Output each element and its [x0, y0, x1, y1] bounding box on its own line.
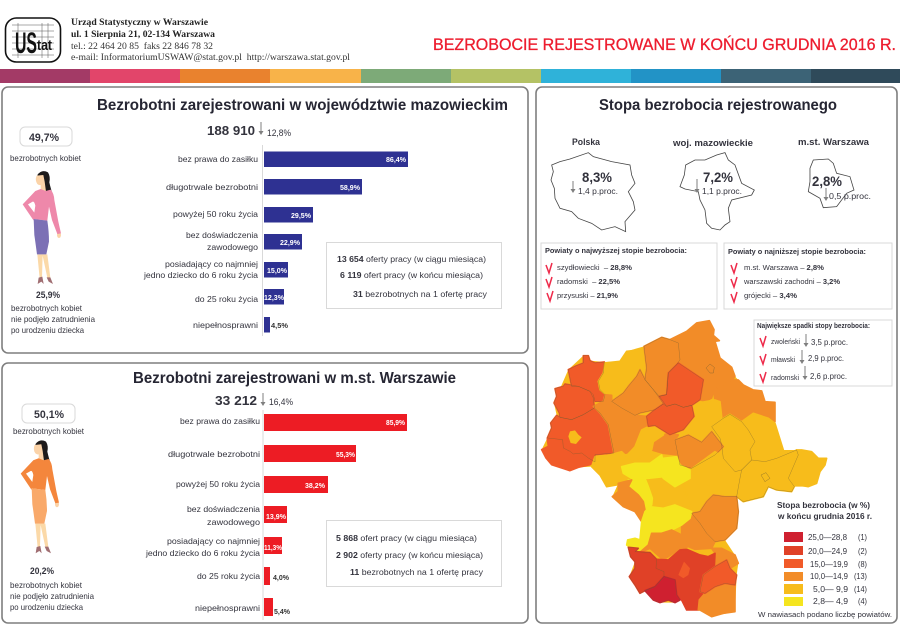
map legend: W nawiasach podano liczbę powiatów.	[758, 610, 892, 619]
total unemployed: 188 910	[207, 123, 255, 138]
bar chart: mazowieckie: 4,5%	[271, 321, 289, 330]
share of women box	[13, 404, 85, 436]
rate: Polska: 8,3%	[582, 169, 613, 185]
bar chart: Warszawa: 4,0%	[273, 573, 290, 582]
choropleth map of powiats	[542, 321, 827, 617]
main title: BEZROBOCIE REJESTROWANE W KOŃCU GRUDNIA 2016 R.	[433, 35, 896, 54]
box: lowest rate: Powiaty o najniższej stopie bezrobocia:	[728, 247, 866, 256]
rate: m.st. Warszawa: m.st. Warszawa	[798, 137, 870, 147]
rate: woj. mazowieckie: 7,2%	[703, 169, 734, 185]
box: largest drops: 2,9 p.proc.	[808, 354, 844, 363]
bar chart: mazowieckie: powyżej 50 roku życia	[173, 209, 258, 219]
header address text	[71, 17, 351, 62]
job offers box	[326, 520, 502, 586]
bar chart: Warszawa: jedno dziecko do 6 roku życia	[145, 548, 260, 558]
rate: Polska: 1,4 p.proc.	[578, 186, 618, 196]
map legend: (8)	[858, 560, 867, 569]
job offers box	[326, 242, 502, 308]
map legend: (14)	[854, 585, 867, 594]
bar chart: Warszawa: 85,9%	[386, 418, 406, 427]
caption: women after childbirth: 25,9%	[36, 290, 60, 301]
share of women box: bezrobotnych kobiet	[10, 154, 82, 163]
map legend: (1)	[858, 533, 867, 542]
bar chart: mazowieckie: 15,0%	[267, 266, 288, 275]
bar chart: Warszawa: niepełnosprawni	[195, 603, 260, 613]
rate: m.st. Warszawa: 2,8%	[812, 173, 843, 189]
map legend: 10,0—14,9	[810, 572, 849, 581]
bar chart: Warszawa: 13,9%	[266, 512, 287, 521]
box: largest drops: radomski	[771, 375, 799, 382]
map legend: 25,0—28,8	[808, 533, 848, 542]
job offers box: 13 654 oferty pracy (w ciągu miesiąca)	[337, 254, 486, 264]
job offers box: 11 bezrobotnych na 1 ofertę pracy	[350, 567, 484, 577]
box: lowest rate: m.st. Warszawa – 2,8%	[744, 263, 824, 272]
box: highest rate: Powiaty o najwyższej stopie bezrobocia:	[545, 246, 687, 255]
bar chart: mazowieckie: jedno dziecko do 6 roku życia	[143, 270, 258, 280]
bar chart: Warszawa: do 25 roku życia	[197, 571, 260, 581]
rate: Polska: Polska	[572, 137, 601, 147]
rate: m.st. Warszawa	[798, 137, 871, 208]
bar chart: mazowieckie: zawodowego	[207, 242, 258, 252]
job offers box: 2 902 oferty pracy (w końcu miesiąca)	[336, 550, 483, 560]
header address text: ul. 1 Sierpnia 21, 02-134 Warszawa	[71, 29, 216, 39]
share of women box: 50,1%	[34, 409, 64, 421]
bar chart: mazowieckie: długotrwale bezrobotni	[166, 182, 258, 192]
rate: woj. mazowieckie: woj. mazowieckie	[672, 138, 753, 148]
bar chart: Warszawa: 55,3%	[336, 450, 356, 459]
box: largest drops: zwoleński	[771, 339, 800, 346]
map legend: 5,0— 9,9	[813, 585, 849, 594]
panel: województwo mazowieckie	[2, 87, 528, 353]
caption: women after childbirth	[10, 566, 94, 612]
box: lowest rate	[724, 243, 892, 309]
bar chart: mazowieckie: 12,3%	[264, 293, 285, 302]
heading: Bezrobotni zarejestrowani w m.st. Warszawie	[133, 370, 456, 387]
map legend: (13)	[854, 572, 867, 581]
bar chart: Warszawa: 38,2%	[305, 481, 326, 490]
bar chart: mazowieckie: 86,4%	[386, 155, 407, 164]
box: lowest rate: warszawski zachodni – 3,2%	[743, 277, 840, 286]
logo: Urząd Statystyczny: tat	[37, 37, 52, 54]
icon: woman in pink	[23, 171, 61, 284]
map legend: Stopa bezrobocia (w %)	[777, 500, 870, 510]
bar chart: mazowieckie	[143, 145, 408, 336]
logo: Urząd Statystyczny	[6, 18, 60, 62]
header address text: Urząd Statystyczny w Warszawie	[71, 17, 208, 27]
bar chart: mazowieckie: bez prawa do zasiłku	[178, 154, 258, 164]
job offers box: 5 868 ofert pracy (w ciągu miesiąca)	[336, 533, 477, 543]
bar chart: Warszawa: zawodowego	[207, 517, 260, 527]
total unemployed	[207, 122, 291, 139]
box: largest drops	[754, 320, 892, 386]
bar chart: Warszawa: bez prawa do zasiłku	[180, 416, 260, 426]
heading: Bezrobotni zarejestrowani w województwie mazowieckim	[97, 97, 508, 114]
map legend: (2)	[858, 547, 867, 556]
rate: Polska	[551, 137, 635, 232]
map legend	[758, 500, 892, 619]
map legend: (4)	[858, 597, 867, 606]
caption: women after childbirth: nie podjęło zatrudnienia	[11, 315, 95, 324]
rate: woj. mazowieckie: 1,1 p.proc.	[702, 186, 742, 196]
map legend: 2,8— 4,9	[813, 597, 849, 606]
bar chart: mazowieckie: posiadający co najmniej	[165, 259, 258, 269]
bar chart: mazowieckie: bez doświadczenia	[186, 230, 258, 240]
caption: women after childbirth: 20,2%	[30, 566, 54, 577]
box: highest rate	[541, 243, 717, 309]
box: highest rate: przysuski – 21,9%	[557, 291, 618, 300]
job offers box: 31 bezrobotnych na 1 ofertę pracy	[353, 289, 488, 299]
heading: Stopa bezrobocia rejestrowanego	[599, 97, 837, 114]
map legend: 15,0—19,9	[810, 560, 849, 569]
box: largest drops: 3,5 p.proc.	[811, 338, 848, 347]
bar chart: mazowieckie: do 25 roku życia	[195, 294, 258, 304]
panel: stopa bezrobocia	[536, 87, 897, 623]
header address text: tel.: 22 464 20 85 faks 22 846 78 32	[71, 41, 213, 51]
caption: women after childbirth: bezrobotnych kobiet	[10, 581, 83, 590]
total unemployed: 33 212	[215, 393, 257, 408]
bar chart: Warszawa: długotrwale bezrobotni	[168, 449, 260, 459]
rate: m.st. Warszawa: 0,5 p.proc.	[829, 191, 871, 201]
share of women box: bezrobotnych kobiet	[13, 427, 85, 436]
panel: m.st. Warszawa	[2, 363, 528, 623]
bar chart: Warszawa: 11,3%	[264, 543, 283, 552]
caption: women after childbirth: nie podjęło zatrudnienia	[10, 592, 94, 601]
job offers box: 6 119 ofert pracy (w końcu miesiąca)	[340, 270, 483, 280]
logo: Urząd Statystyczny: US	[15, 27, 37, 60]
caption: women after childbirth	[11, 290, 95, 335]
bar chart: Warszawa: posiadający co najmniej	[167, 536, 260, 546]
icon: woman in orange	[21, 440, 59, 553]
caption: women after childbirth: po urodzeniu dziecka	[10, 603, 83, 612]
bar chart: mazowieckie: 22,9%	[280, 238, 301, 247]
bar chart: mazowieckie: 58,9%	[340, 183, 361, 192]
caption: women after childbirth: po urodzeniu dziecka	[11, 326, 84, 335]
bar chart: Warszawa: bez doświadczenia	[187, 504, 260, 514]
bar chart: Warszawa: powyżej 50 roku życia	[176, 479, 260, 489]
box: largest drops: mławski	[771, 357, 795, 364]
box: lowest rate: grójecki – 3,4%	[744, 291, 797, 300]
share of women box: 49,7%	[29, 132, 59, 144]
box: largest drops: Największe spadki stopy bezrobocia:	[757, 323, 870, 330]
total unemployed	[215, 393, 293, 408]
bar chart: mazowieckie: 29,5%	[291, 211, 312, 220]
caption: women after childbirth: bezrobotnych kobiet	[11, 304, 83, 313]
box: highest rate: radomski – 22,5%	[557, 277, 620, 286]
bar chart: Warszawa: 5,4%	[274, 607, 291, 616]
rate: woj. mazowieckie	[672, 138, 754, 230]
map legend: 20,0—24,9	[808, 547, 848, 556]
total unemployed: 12,8%	[267, 128, 291, 139]
box: largest drops: 2,6 p.proc.	[810, 372, 847, 381]
header address text: e-mail: InformatoriumUSWAW@stat.gov.pl http://warszawa.stat.gov.pl	[71, 52, 351, 62]
box: highest rate: szydłowiecki – 28,8%	[557, 263, 632, 272]
total unemployed: 16,4%	[269, 397, 293, 408]
bar chart: mazowieckie: niepełnosprawni	[193, 320, 258, 330]
share of women box	[10, 127, 82, 163]
colour stripe	[0, 69, 900, 83]
map legend: w końcu grudnia 2016 r.	[777, 511, 872, 521]
bar chart: Warszawa	[145, 410, 407, 620]
